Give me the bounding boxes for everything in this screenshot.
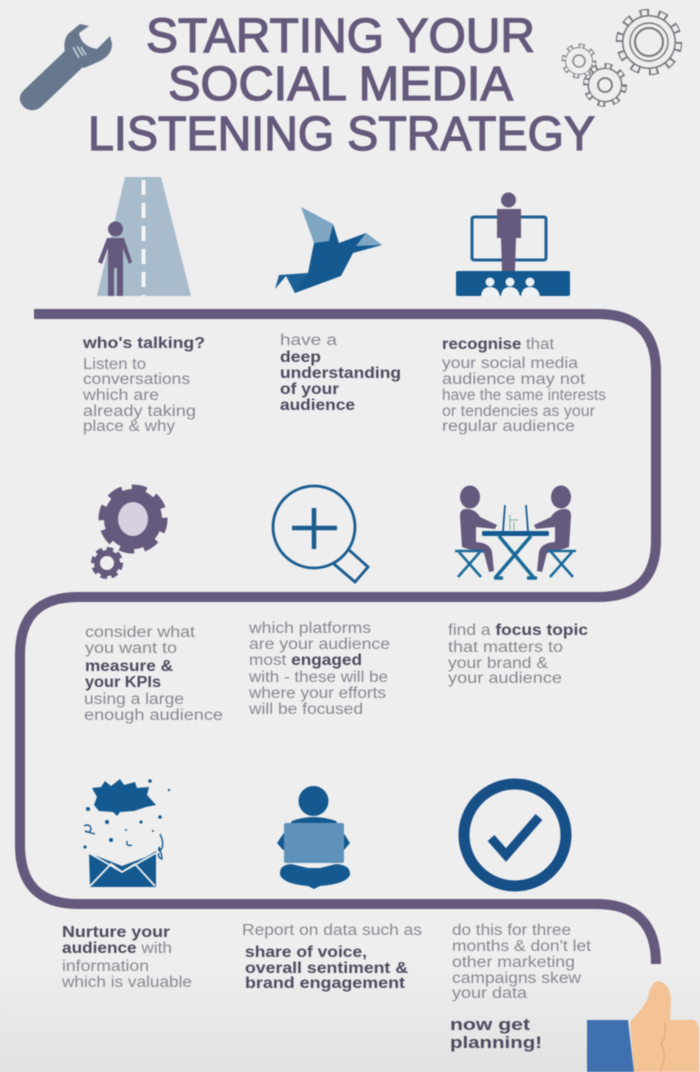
text: understanding audience: have a	[280, 332, 337, 349]
text: report on data: Report on data such as	[242, 922, 422, 939]
text: understanding audience: of your	[280, 381, 339, 398]
text: measure KPIs: consider what	[85, 624, 196, 641]
text: understanding audience	[280, 332, 401, 414]
text: report on data	[242, 922, 422, 992]
text: measure KPIs: measure &	[85, 658, 173, 675]
winding path line	[20, 314, 656, 964]
text: three months: other marketing	[452, 954, 575, 971]
text: who's talking: already taking	[83, 403, 196, 420]
text: platforms: are your audience	[249, 636, 390, 653]
icon: presenter on stage	[456, 192, 570, 296]
icon: gears	[564, 12, 679, 104]
icon: origami bird	[275, 207, 382, 293]
text: understanding audience: deep	[280, 349, 321, 366]
text: focus topic	[448, 622, 588, 687]
text: focus topic: your brand &	[448, 655, 549, 672]
text: measure KPIs: you want to	[85, 640, 177, 657]
text: recognise: have the same interests	[442, 387, 606, 404]
icon: wrench	[20, 24, 112, 110]
text: recognise: or tendencies as your	[442, 403, 595, 420]
text: who's talking: who's talking?	[82, 335, 205, 352]
icon: purple gears	[93, 488, 164, 577]
text: report on data: share of voice,	[245, 944, 367, 961]
text: recognise: recognise that	[442, 336, 555, 353]
text: recognise: regular audience	[442, 418, 575, 435]
text: report on data: overall sentiment &	[245, 960, 408, 977]
text: now get planning: now get	[450, 1015, 530, 1034]
icon: check mark circle	[464, 784, 566, 886]
icon: magnifier with plus	[273, 486, 368, 582]
text: who's talking: Listen to	[83, 356, 146, 373]
text: three months: months & don't let	[452, 938, 592, 955]
text: now get planning: planning!	[450, 1033, 542, 1052]
text: focus topic: that matters to	[448, 639, 563, 656]
title: STARTING YOUR	[146, 10, 535, 63]
text: nurture audience	[61, 924, 192, 991]
text: report on data: brand engagement	[245, 975, 405, 992]
icon: envelope with burst and confetti	[83, 779, 170, 887]
text: recognise: your social media	[442, 355, 578, 372]
text: now get planning	[450, 1015, 542, 1052]
text: who's talking	[82, 335, 205, 435]
text: three months: do this for three	[452, 922, 571, 939]
text: platforms: where your efforts	[248, 685, 386, 702]
text: nurture audience: information	[62, 958, 149, 975]
text: nurture audience: which is valuable	[61, 974, 192, 991]
text: nurture audience: audience with	[62, 940, 172, 957]
text: focus topic: find a focus topic	[448, 622, 588, 639]
text: platforms: most engaged	[249, 652, 362, 669]
title	[88, 10, 595, 161]
icon: person with laptop	[277, 786, 350, 889]
text: platforms: with - these will be	[248, 669, 388, 686]
title: SOCIAL MEDIA	[168, 58, 513, 111]
icon: thumbs up hand	[587, 981, 699, 1072]
text: nurture audience: Nurture your	[62, 924, 170, 941]
text: measure KPIs: enough audience	[84, 707, 223, 724]
text: who's talking: place & why	[83, 418, 175, 435]
text: who's talking: conversations	[83, 371, 190, 388]
text: measure KPIs: using a large	[84, 691, 184, 708]
text: focus topic: your audience	[448, 670, 562, 687]
text: recognise	[442, 336, 606, 435]
text: recognise: audience may not	[442, 371, 586, 388]
text: understanding audience: understanding	[280, 365, 401, 382]
text: platforms: will be focused	[248, 701, 363, 718]
text: understanding audience: audience	[280, 397, 355, 414]
text: platforms	[248, 620, 390, 718]
icon: two people meeting at a table	[455, 486, 576, 578]
text: measure KPIs: your KPIs	[85, 674, 161, 691]
title: LISTENING STRATEGY	[88, 108, 595, 161]
text: three months: campaigns skew	[452, 970, 582, 987]
text: platforms: which platforms	[248, 620, 371, 637]
text: who's talking: which are	[82, 387, 159, 404]
icon: road with person	[97, 177, 191, 296]
text: three months: your data	[452, 985, 527, 1002]
text: three months	[452, 922, 592, 1002]
text: measure KPIs	[84, 624, 223, 724]
